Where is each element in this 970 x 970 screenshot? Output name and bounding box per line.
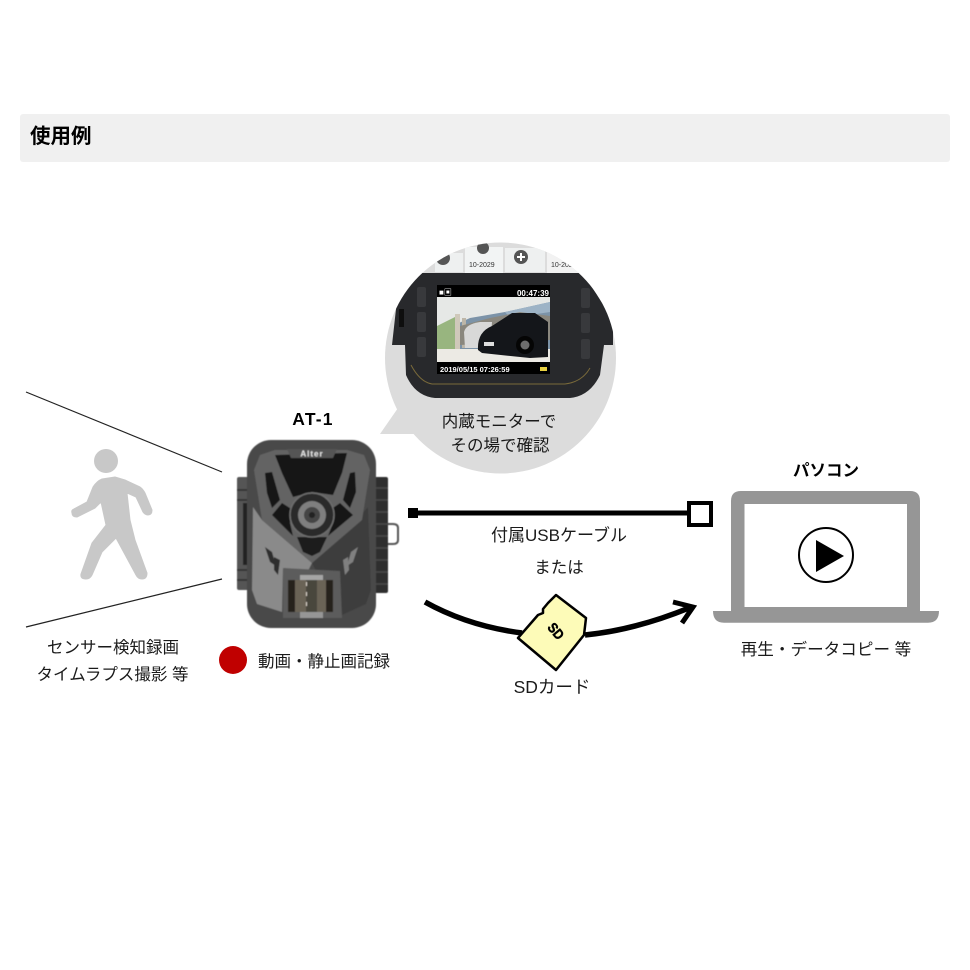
section heading bar — [20, 114, 950, 162]
monitor screen — [437, 285, 550, 374]
icon: SD card — [518, 595, 586, 670]
monitor screen: 2019/05/15 07:26:59 — [440, 365, 510, 374]
lens — [290, 493, 334, 537]
connector word: または — [534, 558, 584, 577]
record dot and label — [219, 646, 390, 674]
monitor photo: 10-202. — [551, 262, 575, 269]
right strap — [372, 477, 388, 593]
icon: laptop — [713, 491, 939, 623]
sensor detection lines — [26, 392, 222, 627]
cable caption: 付属USBケーブル — [491, 525, 627, 545]
caption: sensor recording — [37, 638, 188, 684]
camera AT-1 — [237, 440, 398, 628]
caption: sensor recording: センサー検知録画 — [47, 638, 179, 657]
caption: sensor recording: タイムラプス撮影 等 — [37, 665, 188, 684]
icon: play button — [799, 528, 853, 582]
brand plate: Alter — [300, 450, 324, 458]
caption: SD card: SDカード — [514, 677, 590, 697]
monitor screen: ■▣ — [439, 288, 452, 297]
icon: walking person — [72, 449, 152, 579]
record dot and label: 動画・静止画記録 — [258, 652, 390, 671]
monitor screen: 00:47:39 — [517, 289, 550, 298]
monitor photo: 10-2029 — [469, 262, 495, 269]
caption: PC playback: 再生・データコピー 等 — [741, 639, 911, 659]
camera body — [247, 440, 376, 628]
icon: SD card: SD — [544, 619, 568, 643]
strap loop — [388, 524, 398, 544]
USB cable — [408, 503, 711, 525]
callout text — [442, 412, 556, 455]
monitor photo — [392, 242, 613, 398]
label: PC: パソコン — [793, 461, 859, 480]
arrow: SD card transfer — [425, 602, 693, 635]
callout text: 内蔵モニターで — [442, 412, 556, 431]
section heading bar: 使用例 — [30, 125, 92, 148]
brand plate — [287, 449, 337, 458]
camera AT-1 label: AT-1 — [292, 409, 334, 429]
callout text: その場で確認 — [450, 436, 550, 455]
callout bubble: built-in monitor — [380, 242, 616, 474]
left strap — [237, 477, 253, 590]
